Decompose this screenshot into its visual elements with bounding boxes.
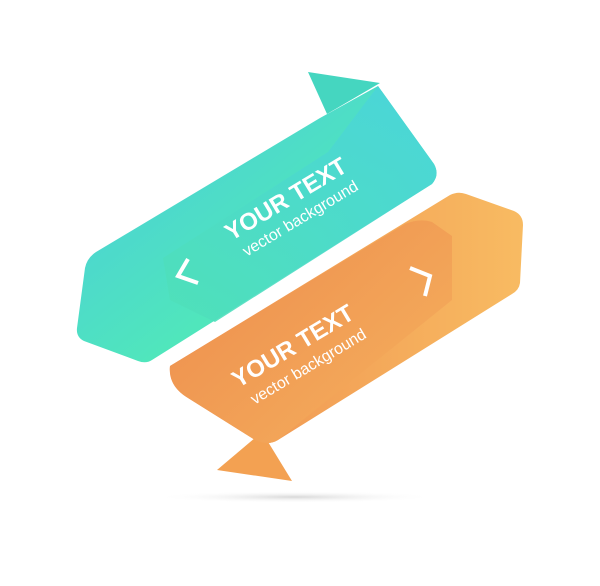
orange inner panel bbox=[170, 220, 452, 443]
orange body bbox=[170, 193, 523, 443]
orange title: YOUR TEXT bbox=[227, 299, 359, 394]
chevron right bbox=[410, 268, 430, 296]
chevron left bbox=[178, 259, 198, 283]
teal inner panel bbox=[163, 86, 437, 322]
teal subtitle: vector background bbox=[240, 178, 361, 260]
orange fold tail bbox=[217, 432, 292, 481]
teal arrow banner bbox=[77, 72, 437, 362]
orange subtitle: vector background bbox=[248, 326, 369, 408]
shadow bbox=[155, 491, 435, 503]
orange arrow banner bbox=[170, 193, 523, 481]
teal fold tail bbox=[308, 72, 380, 114]
teal title: YOUR TEXT bbox=[220, 152, 352, 247]
teal body bbox=[77, 86, 437, 362]
